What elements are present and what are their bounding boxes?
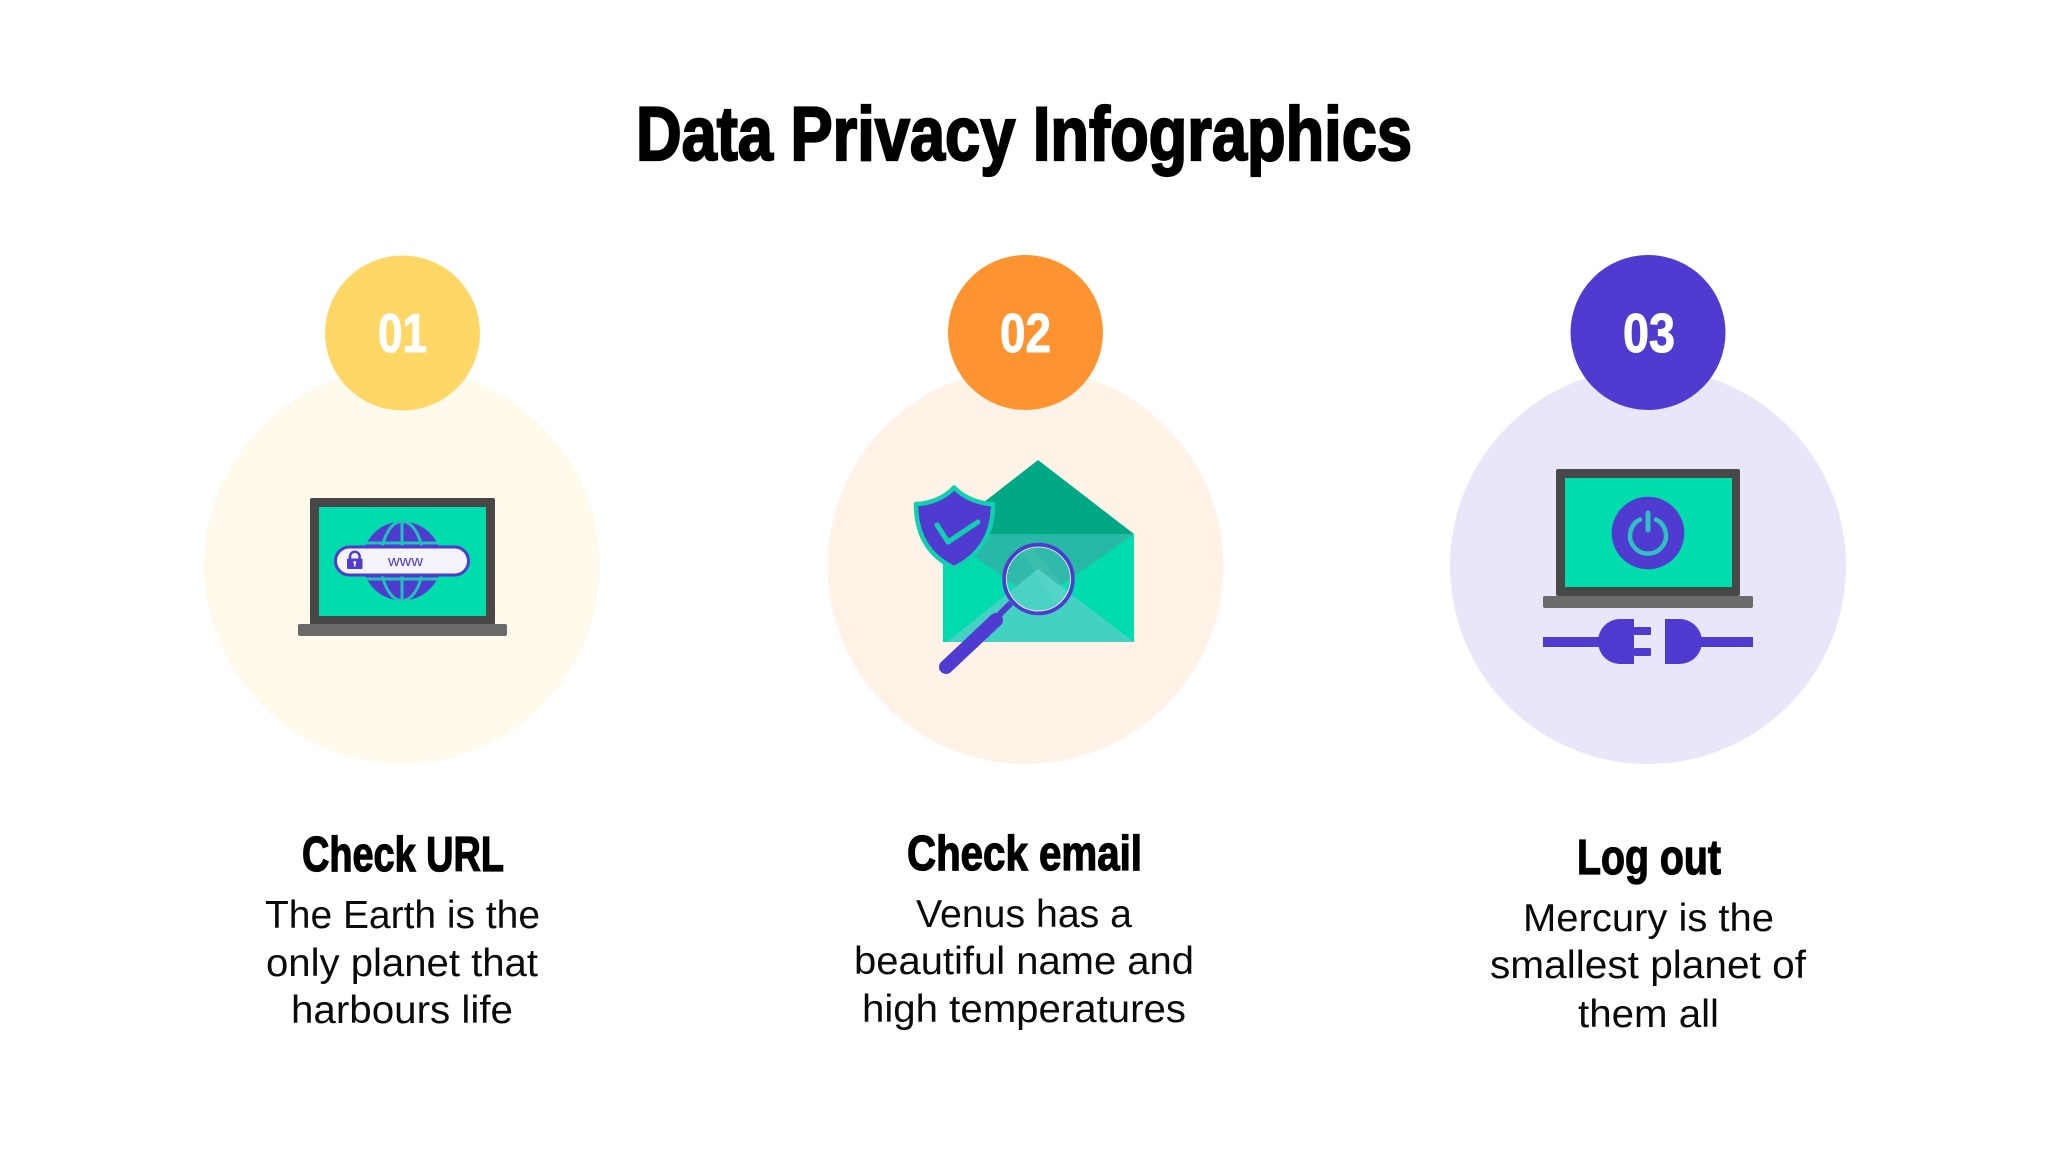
description: harbours life <box>291 989 513 1032</box>
description: only planet that <box>266 942 538 985</box>
URL bar <box>336 547 468 575</box>
number badge 03: 03 <box>1623 302 1675 364</box>
number badge 01 <box>325 256 480 410</box>
heading: Log out <box>1577 831 1721 885</box>
heading: Check email <box>907 827 1142 881</box>
panel: check email <box>828 255 1224 1031</box>
description: high temperatures <box>862 988 1186 1031</box>
description: beautiful name and <box>854 940 1194 983</box>
icon: laptop with URL bar <box>298 498 507 636</box>
number badge 01: 01 <box>378 302 427 364</box>
number badge 03 <box>1570 255 1726 410</box>
description: The Earth is the <box>265 894 540 937</box>
icon: padlock <box>347 552 362 569</box>
description <box>1490 897 1806 1036</box>
panel: log out <box>1450 255 1846 1036</box>
icon: envelope <box>943 460 1134 642</box>
background circle <box>204 368 600 764</box>
description: them all <box>1578 993 1719 1036</box>
description <box>265 894 540 1032</box>
background circle <box>828 368 1224 764</box>
description: Mercury is the <box>1523 897 1774 940</box>
title: Data Privacy Infographics <box>636 92 1412 177</box>
panel: check URL <box>204 256 600 1032</box>
icon: laptop with power button <box>1543 469 1753 608</box>
description <box>854 893 1194 1031</box>
description: smallest planet of <box>1490 944 1806 987</box>
icon: shield with check <box>916 488 993 568</box>
icon: unplugged cable <box>1543 619 1753 664</box>
icon: magnifying glass <box>946 540 1080 667</box>
number badge 02: 02 <box>1000 302 1051 364</box>
www label: www <box>387 553 423 570</box>
icon: globe <box>362 522 442 600</box>
number badge 02 <box>948 255 1103 410</box>
heading: Check URL <box>302 828 504 882</box>
background circle <box>1450 368 1846 764</box>
description: Venus has a <box>916 893 1132 936</box>
